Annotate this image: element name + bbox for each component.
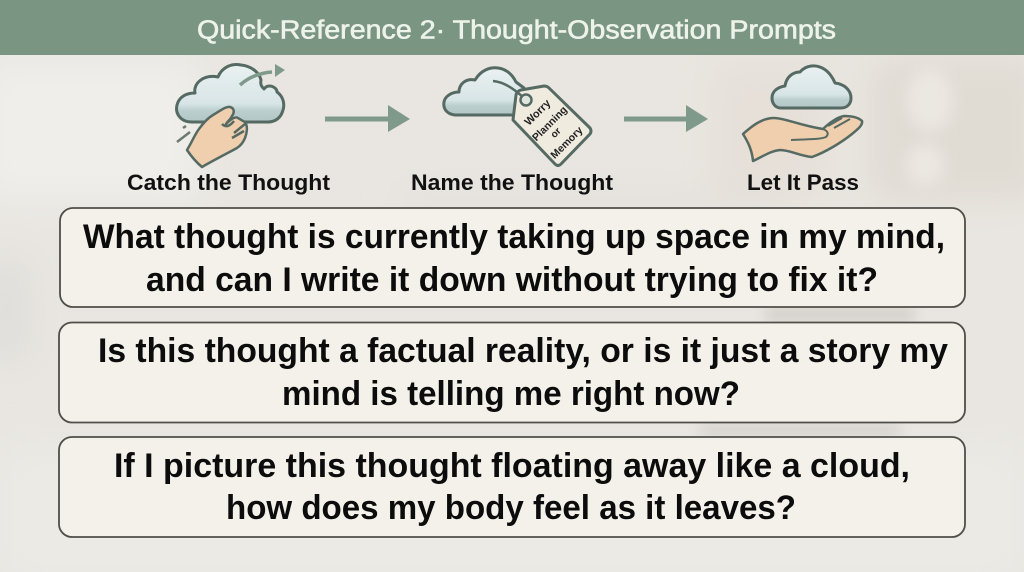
label: Catch the Thought <box>127 170 331 195</box>
header band <box>0 0 1024 55</box>
prompt card 3: If I picture this thought floating away like a cloud, <box>114 447 910 485</box>
prompt card 2 <box>59 322 965 422</box>
icon: label tag: Memory <box>548 124 585 161</box>
icon: catching hand <box>177 107 247 167</box>
title: Quick-Reference 2· Thought-Observation Prompts <box>197 16 836 44</box>
label: Let It Pass <box>747 170 859 195</box>
icon: label tag: Worry <box>522 97 554 128</box>
step 3: let it pass <box>743 66 862 195</box>
icon: open hand <box>743 116 862 161</box>
prompt card 2: Is this thought a factual reality, or is it just a story my <box>98 332 948 370</box>
step 1: catch the thought <box>127 64 331 195</box>
prompt card 1 <box>60 208 965 307</box>
icon: cloud <box>772 66 851 108</box>
prompt card 1: and can I write it down without trying to fix it? <box>146 261 878 299</box>
prompt card 2: mind is telling me right now? <box>282 375 740 413</box>
icon: label tag: or <box>549 126 564 141</box>
icon: label tag <box>493 81 591 166</box>
prompt card 1: What thought is currently taking up space in my mind, <box>83 218 945 256</box>
arrow 1 <box>325 105 410 132</box>
prompt card 3: how does my body feel as it leaves? <box>226 489 796 527</box>
icon: label tag: Planning <box>530 104 570 144</box>
prompt card 3 <box>59 437 965 537</box>
arrow 2 <box>624 105 708 132</box>
step 2: name the thought <box>411 68 614 195</box>
icon: cloud with motion arrow <box>177 64 285 122</box>
label: Name the Thought <box>411 170 614 195</box>
icon: cloud <box>444 68 524 115</box>
